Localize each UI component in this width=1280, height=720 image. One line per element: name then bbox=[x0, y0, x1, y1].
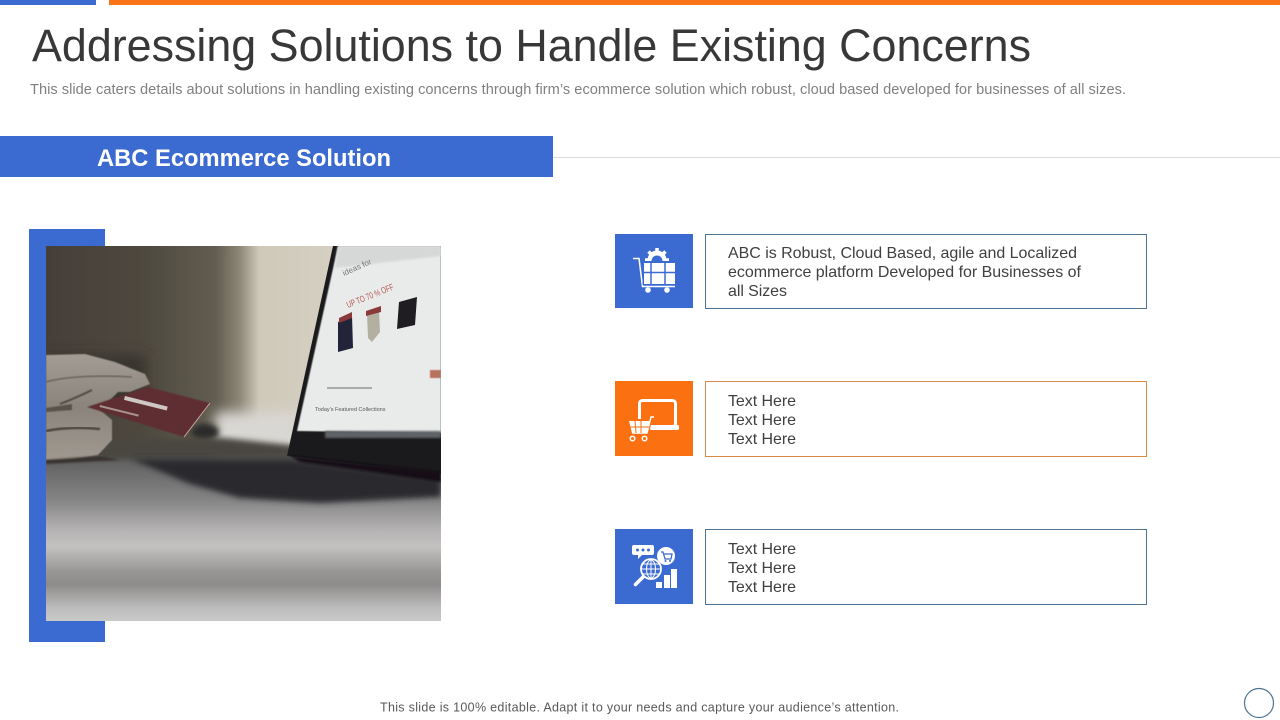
title: Addressing Solutions to Handle Existing Concerns bbox=[32, 20, 1031, 71]
top accent bar: blue bbox=[0, 0, 96, 5]
photo: hand holding credit card at laptop bbox=[46, 246, 441, 621]
keyboard bbox=[131, 459, 441, 503]
text box 1: ABC is Robust, Cloud Based, agile and Localized bbox=[728, 245, 1077, 262]
text box 1: all Sizes bbox=[728, 283, 787, 300]
text box 2 bbox=[706, 382, 1146, 456]
text box 2: Text Here bbox=[728, 393, 796, 410]
laptop screen bbox=[287, 246, 441, 474]
photo: hand holding credit card at laptop: ideas for bbox=[341, 257, 373, 278]
section heading bar bbox=[0, 136, 553, 177]
text box 1: ecommerce platform Developed for Businesses of bbox=[728, 264, 1082, 281]
laptop screen products bbox=[338, 316, 353, 352]
credit card bbox=[87, 387, 210, 437]
hand bbox=[46, 354, 150, 460]
text box 3 bbox=[706, 530, 1146, 604]
icon: global ecommerce analytics bbox=[615, 529, 693, 604]
text box 3: Text Here bbox=[728, 541, 796, 558]
icon: shopping cart with gear bbox=[615, 234, 693, 308]
photo: hand holding credit card at laptop: UP TO 70 % OFF bbox=[345, 282, 395, 310]
photo: hand holding credit card at laptop: Today's Featured Collections bbox=[315, 407, 386, 413]
decorative circle button bbox=[1244, 688, 1274, 718]
text box 2: Text Here bbox=[728, 431, 796, 448]
text box 2: Text Here bbox=[728, 412, 796, 429]
footer note: This slide is 100% editable. Adapt it to your needs and capture your audience’s attention. bbox=[380, 700, 899, 714]
text box 3: Text Here bbox=[728, 560, 796, 577]
top accent bar: orange bbox=[109, 0, 1280, 5]
subtitle: This slide caters details about solutions in handling existing concerns through firm’s ecommerce solution which robust, cloud based developed for businesses of all sizes. bbox=[30, 82, 1126, 98]
text box 1 bbox=[706, 234, 1146, 308]
image backing panel bbox=[29, 229, 105, 642]
text box 3: Text Here bbox=[728, 579, 796, 596]
section heading bar: ABC Ecommerce Solution bbox=[97, 145, 391, 172]
icon: laptop with shopping cart bbox=[615, 381, 693, 456]
